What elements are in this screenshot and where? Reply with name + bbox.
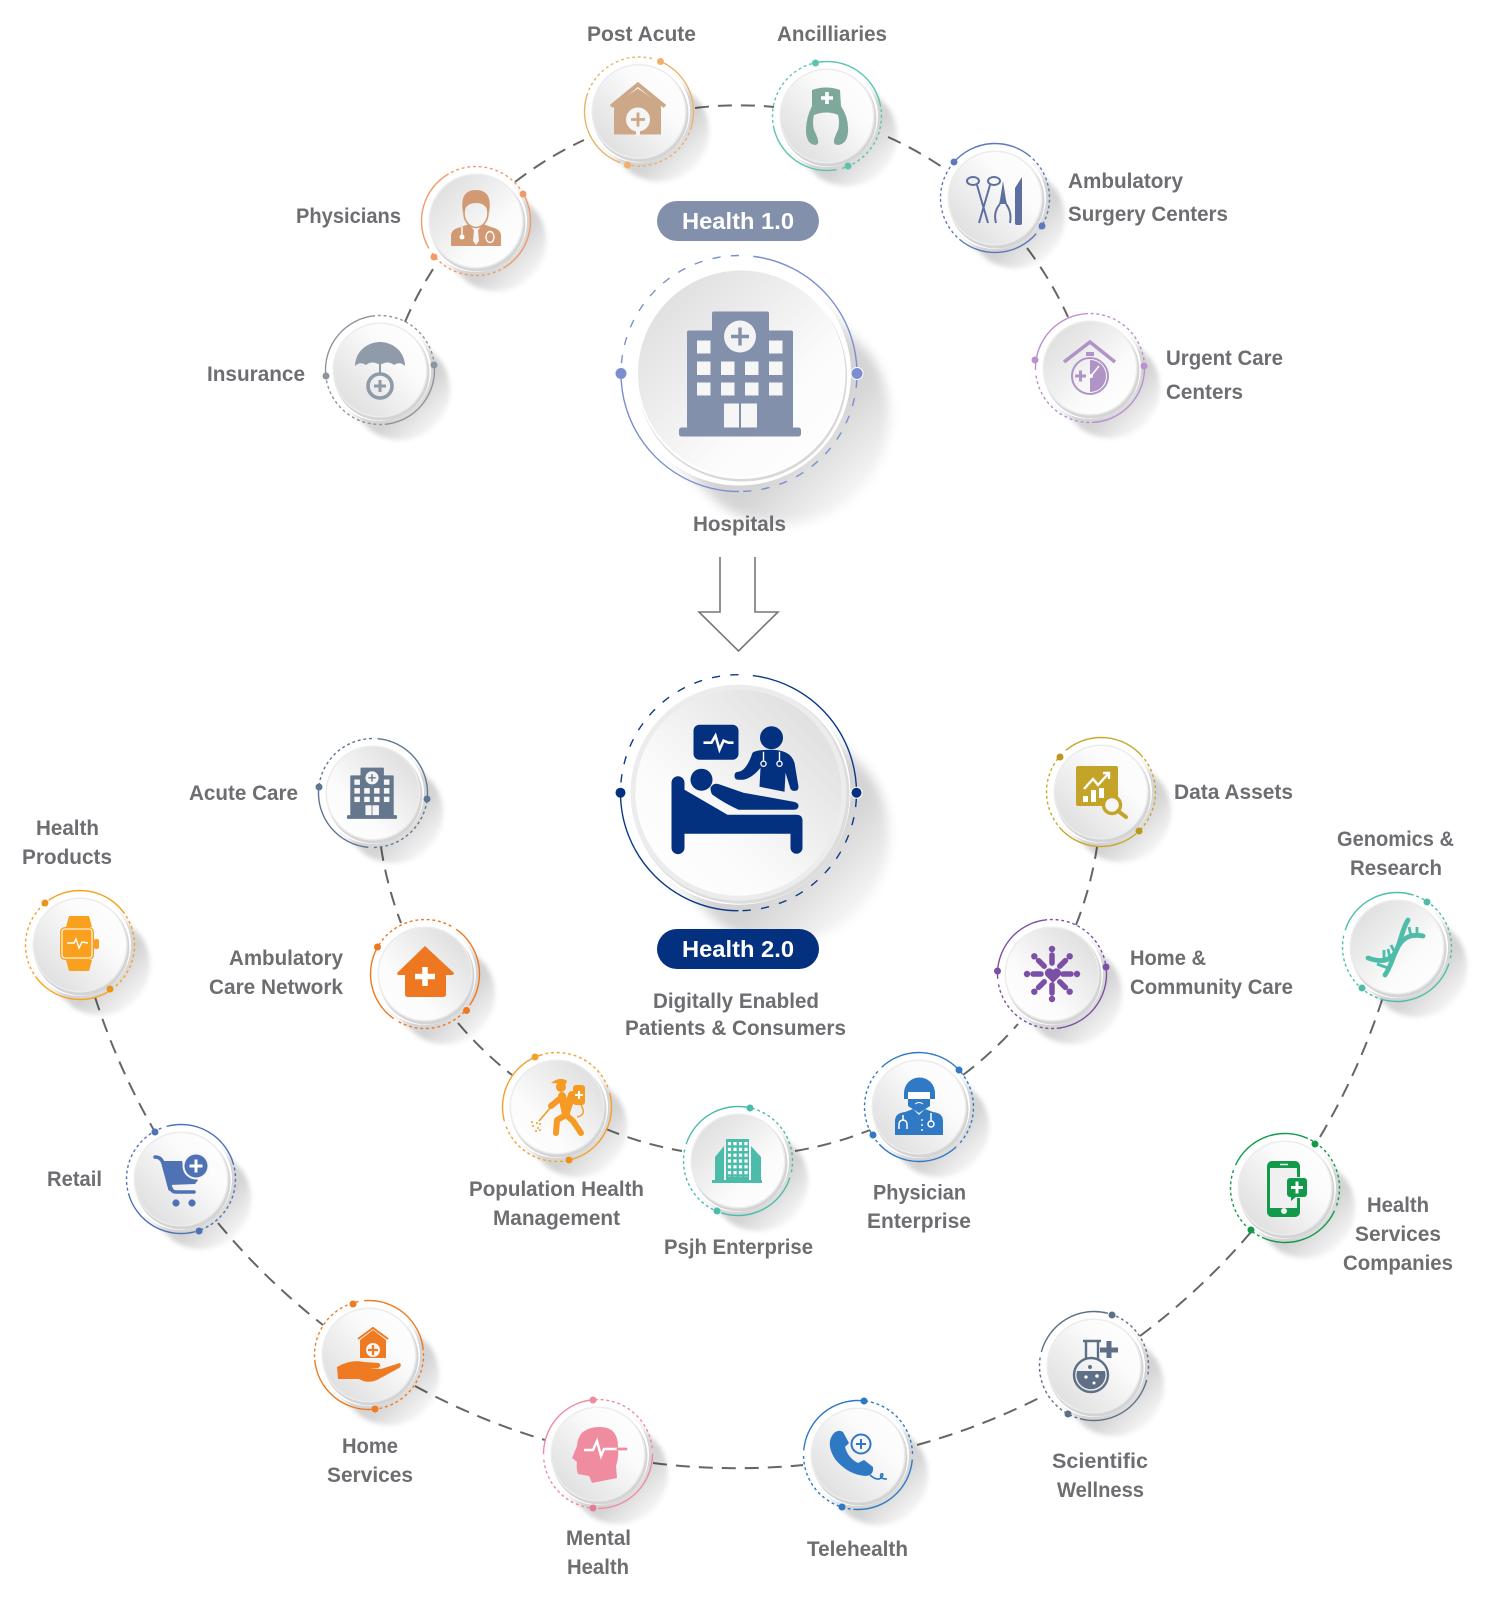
label: Mental Health: Health xyxy=(567,1556,629,1579)
caption: Digitally Enabled Patients & Consumers: Patients & Consumers xyxy=(625,1017,846,1040)
label: Home & Community Care: Home & xyxy=(1130,947,1206,970)
node: Acute Care xyxy=(314,734,443,863)
icon: surgeon with mask xyxy=(895,1078,943,1135)
icon: house with cross xyxy=(397,946,454,997)
node: Physician Enterprise xyxy=(842,1030,996,1184)
icon: community around heart xyxy=(1024,946,1080,1002)
node: Ancilliaries xyxy=(764,53,897,186)
label: Health Services Companies: Health xyxy=(1367,1194,1429,1217)
label: Ambulatory Surgery Centers xyxy=(1068,170,1228,226)
connectors: Health 1.0 arc xyxy=(405,105,1068,322)
label: Scientific Wellness: Wellness xyxy=(1057,1479,1144,1502)
label: Mental Health xyxy=(566,1527,631,1579)
label: Telehealth: Telehealth xyxy=(807,1538,908,1561)
label: Ambulatory Care Network: Care Network xyxy=(209,976,343,999)
node: Post Acute xyxy=(569,42,709,181)
icon: telephone with plus xyxy=(830,1431,887,1479)
label: Mental Health: Mental xyxy=(566,1527,631,1550)
icon: house with cross xyxy=(611,84,665,136)
label: Acute Care: Acute Care xyxy=(189,782,298,805)
node: Health Services Companies xyxy=(1213,1116,1357,1260)
node: Insurance xyxy=(321,311,450,440)
hub: Digitally enabled patients xyxy=(616,675,889,943)
node: Telehealth xyxy=(799,1396,928,1525)
node: Genomics & Research xyxy=(1328,878,1467,1017)
badge: Health 1.0: Health 1.0 xyxy=(682,208,794,234)
label: Post Acute: Post Acute xyxy=(587,23,696,46)
label: Genomics & Research: Research xyxy=(1350,857,1442,880)
node: Health Products xyxy=(4,869,156,1021)
arrow: Health 1.0 to Health 2.0 xyxy=(699,557,778,651)
label: Ambulatory Care Network: Ambulatory xyxy=(229,947,343,970)
label: Psjh Enterprise: Psjh Enterprise xyxy=(664,1236,813,1259)
label: Scientific Wellness xyxy=(1052,1450,1148,1502)
connectors: outer Health 2.0 arc xyxy=(95,997,1382,1468)
node: Mental Health xyxy=(544,1396,668,1524)
icon: umbrella with cross xyxy=(355,342,405,398)
label: Home Services: Services xyxy=(327,1464,413,1487)
label: Scientific Wellness: Scientific xyxy=(1052,1450,1148,1473)
icon: hospital building xyxy=(679,312,801,436)
label: Home & Community Care xyxy=(1130,947,1293,999)
label: Ambulatory Surgery Centers: Surgery Centers xyxy=(1068,203,1228,226)
label: Physician Enterprise: Physician xyxy=(873,1182,966,1204)
icon: phone with medical message xyxy=(1267,1161,1308,1217)
label: Physician Enterprise xyxy=(867,1182,971,1233)
icon: doctor xyxy=(451,190,501,246)
icon: DNA helix xyxy=(1368,920,1423,975)
node: Physicians xyxy=(402,147,550,295)
hub: Hospitals xyxy=(616,256,890,524)
badge: Health 2.0 xyxy=(657,929,819,969)
icon: chart with magnifier xyxy=(1076,766,1126,817)
label: Ambulatory Care Network xyxy=(209,947,343,999)
icon: person spraying disinfectant xyxy=(531,1079,585,1133)
icon: flask with plus xyxy=(1074,1341,1118,1392)
label: Genomics & Research xyxy=(1337,828,1454,880)
label: Health Services Companies: Companies xyxy=(1343,1252,1453,1275)
label: Population Health Management: Management xyxy=(493,1207,620,1230)
node: Ambulatory Care Network xyxy=(349,898,501,1050)
badge: Health 1.0 xyxy=(657,201,819,241)
label: Insurance: Insurance xyxy=(207,363,305,386)
label: Urgent Care Centers: Centers xyxy=(1166,381,1243,404)
icon: nurse xyxy=(806,88,848,145)
node: Home & Community Care xyxy=(993,915,1122,1044)
caption: Digitally Enabled Patients & Consumers xyxy=(625,990,846,1040)
label: Data Assets: Data Assets xyxy=(1174,781,1293,804)
label: Health Products xyxy=(22,817,112,869)
icon: hospital xyxy=(347,768,397,819)
icon: head with pulse xyxy=(572,1427,626,1483)
node: Ambulatory Surgery Centers xyxy=(918,121,1072,275)
icon: smartwatch xyxy=(60,916,99,971)
label: Home Services xyxy=(327,1435,413,1487)
icon: house with stopwatch xyxy=(1064,342,1115,394)
label: Physician Enterprise: Enterprise xyxy=(867,1210,971,1233)
node: Urgent Care Centers xyxy=(1032,312,1160,438)
label: Home & Community Care: Community Care xyxy=(1130,976,1293,999)
connectors: inner Health 2.0 arc xyxy=(381,847,1097,1151)
label: Home Services: Home xyxy=(342,1435,398,1458)
node: Scientific Wellness xyxy=(1027,1299,1164,1436)
icon: surgical tools xyxy=(967,177,1022,225)
label: Health Products: Products xyxy=(22,846,112,869)
label: Urgent Care Centers: Urgent Care xyxy=(1166,347,1283,370)
icon: patient in bed with doctor and monitor xyxy=(672,725,802,854)
label: Physicians: Physicians xyxy=(296,205,401,228)
label: Genomics & Research: Genomics & xyxy=(1337,828,1454,851)
icon: hand holding medical house xyxy=(337,1328,401,1382)
node: Home Services xyxy=(310,1296,439,1425)
node: Data Assets xyxy=(1024,715,1178,869)
label: Ancilliaries: Ancilliaries xyxy=(777,23,887,46)
node: Retail xyxy=(114,1112,251,1249)
label: Hospitals: Hospitals xyxy=(693,513,786,536)
label: Health Products: Health xyxy=(36,817,99,840)
label: Health Services Companies xyxy=(1343,1194,1453,1275)
label: Ambulatory Surgery Centers: Ambulatory xyxy=(1068,170,1183,193)
icon: shopping cart with plus xyxy=(155,1152,210,1207)
node: Psjh Enterprise xyxy=(669,1092,808,1231)
caption: Digitally Enabled Patients & Consumers: Digitally Enabled xyxy=(653,990,819,1013)
label: Health Services Companies: Services xyxy=(1355,1223,1441,1246)
icon: office towers xyxy=(712,1139,762,1183)
badge: Health 2.0: Health 2.0 xyxy=(682,936,794,962)
label: Retail: Retail xyxy=(47,1168,102,1191)
label: Population Health Management xyxy=(469,1178,644,1230)
label: Urgent Care Centers xyxy=(1166,347,1283,404)
node: Population Health Management xyxy=(490,1040,627,1177)
label: Population Health Management: Population Health xyxy=(469,1178,644,1201)
